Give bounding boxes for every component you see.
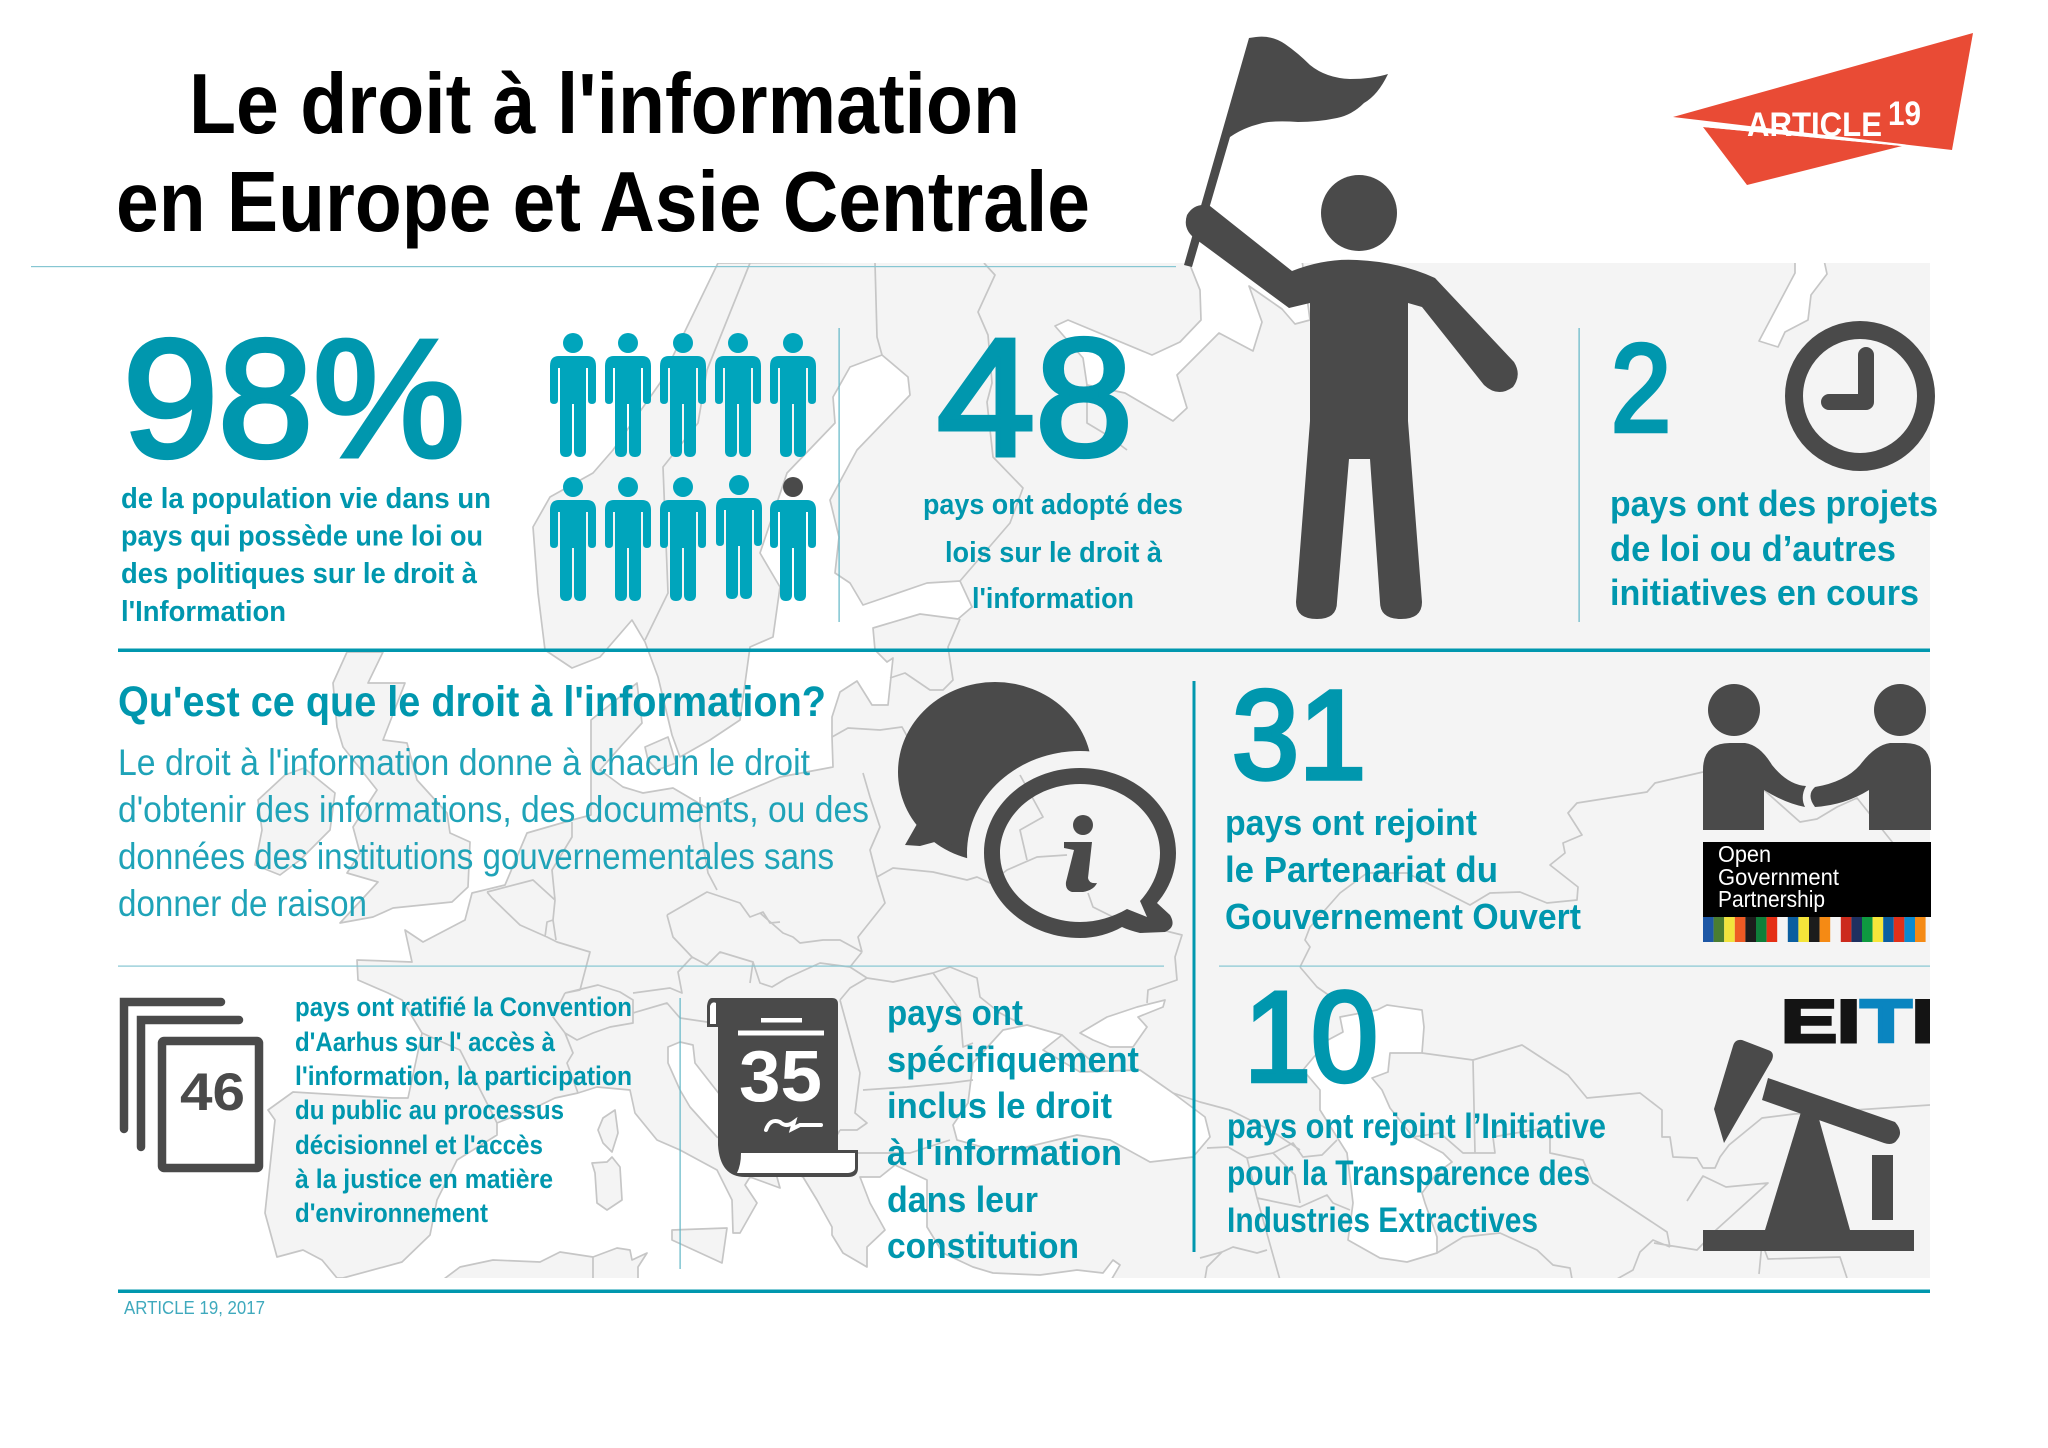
panel: 46 countries Aarhus convention xyxy=(124,992,632,1228)
text: laws adopted: lois sur le droit à xyxy=(945,537,1163,569)
map: North Africa xyxy=(444,1247,648,1278)
icon: figure holding a flag xyxy=(1184,37,1518,619)
footer credit: ARTICLE 19, 2017 xyxy=(124,1298,265,1318)
logo: Article 19 xyxy=(1673,33,1973,185)
text: Aarhus convention: d'environnement xyxy=(295,1198,488,1228)
text: Aarhus convention: à la justice en matière xyxy=(295,1164,553,1194)
icon: handshake xyxy=(1703,684,1931,830)
text: Aarhus convention: pays ont ratifié la Convention xyxy=(295,992,632,1022)
map: United Kingdom xyxy=(333,652,470,923)
text: Aarhus convention: d'Aarhus sur l' accès à xyxy=(295,1027,556,1057)
map: Caspian Sea xyxy=(1303,1005,1452,1262)
text: draft laws: de loi ou d’autres xyxy=(1610,528,1896,569)
text: definition xyxy=(118,742,869,924)
text: population description xyxy=(121,483,491,628)
icon: scroll with 35: 35 xyxy=(739,1037,822,1117)
big number 31: 31 xyxy=(1232,664,1366,806)
map: Black Sea xyxy=(953,1025,1210,1162)
big number 98%: 98% xyxy=(123,306,465,492)
text: constitutional right: constitution xyxy=(887,1225,1079,1266)
map: Ireland xyxy=(255,768,335,875)
panel: 31 countries open government xyxy=(1225,664,1931,942)
heading: Qu'est ce que le droit à l'information? xyxy=(118,678,826,726)
map: Corsica xyxy=(598,1110,618,1152)
logo: Article 19: ARTICLE xyxy=(1747,106,1882,144)
title: en Europe et Asie Centrale xyxy=(116,155,1090,250)
map: Sea of Azov xyxy=(1080,1000,1165,1047)
title xyxy=(116,57,1090,250)
text: draft laws xyxy=(1610,483,1938,613)
text: population description: de la population vie dans un xyxy=(121,483,491,515)
text: laws adopted: l'information xyxy=(972,583,1134,615)
big number 2: 2 xyxy=(1611,320,1671,458)
map: country borders xyxy=(422,263,1930,1280)
logo: Open Government Partnership xyxy=(1703,841,1931,942)
text: Aarhus convention: décisionnel et l'accès xyxy=(295,1130,543,1160)
big number 10: 10 xyxy=(1244,966,1378,1109)
logo: Open Government Partnership: Open xyxy=(1718,841,1771,867)
text: definition: données des institutions gouvernementales sans xyxy=(118,836,834,877)
logo: Open Government Partnership: Partnership xyxy=(1718,886,1825,912)
text: laws adopted: pays ont adopté des xyxy=(923,489,1183,521)
text: definition: donner de raison xyxy=(118,883,367,924)
text: extractive industries: pour la Transparence des xyxy=(1227,1154,1590,1193)
map: Sicily xyxy=(672,1228,727,1263)
text: open government partnership: pays ont rejoint xyxy=(1225,802,1477,843)
text: constitutional right: pays ont xyxy=(887,992,1023,1033)
text: Aarhus convention: du public au processus xyxy=(295,1095,564,1125)
logo: Open Government Partnership: Government xyxy=(1718,864,1840,890)
icon: oil pump xyxy=(1703,1040,1914,1251)
panel: 10 countries EITI xyxy=(1227,966,1935,1251)
title: Le droit à l'information xyxy=(189,57,1020,152)
panel: what is the right to information xyxy=(118,678,1176,938)
icon: scroll with 35 xyxy=(707,998,858,1177)
text: open government partnership: le Partenariat du xyxy=(1225,849,1498,890)
text: population description: l'Information xyxy=(121,596,286,628)
text: constitutional right: à l'information xyxy=(887,1132,1122,1173)
icon: clock xyxy=(1794,330,1926,462)
logo: Article 19: 19 xyxy=(1888,95,1921,133)
text: definition: Le droit à l'information donne à chacun le droit xyxy=(118,742,811,783)
panel: 98% population xyxy=(121,306,816,628)
text: extractive industries: Industries Extractives xyxy=(1227,1201,1538,1240)
map: Sardinia xyxy=(592,1157,622,1210)
text: constitutional right: dans leur xyxy=(887,1179,1038,1220)
panel: 35 countries constitution xyxy=(707,992,1139,1266)
text: draft laws: initiatives en cours xyxy=(1610,572,1919,613)
text: extractive industries xyxy=(1227,1107,1606,1240)
text: constitutional right: inclus le droit xyxy=(887,1085,1112,1126)
text: Aarhus convention: l'information, la participation xyxy=(295,1061,632,1091)
panel: 48 countries xyxy=(923,305,1183,615)
big number 48: 48 xyxy=(937,305,1133,491)
map: Arctic inlet xyxy=(1759,260,1827,347)
text: population description: pays qui possède une loi ou xyxy=(121,520,483,552)
text: definition: d'obtenir des informations, des documents, ou des xyxy=(118,789,869,830)
panel: 2 countries xyxy=(1610,320,1938,613)
icon: stacked documents with 46 xyxy=(124,1002,259,1168)
text: open government partnership: Gouvernement Ouvert xyxy=(1225,896,1581,937)
logo: EITI: EI TI xyxy=(1781,988,1935,1055)
icon: stacked documents with 46: 46 xyxy=(180,1063,245,1122)
map: Danish island xyxy=(645,737,676,770)
icon: speech bubbles with info xyxy=(898,682,1176,938)
text: constitutional right: spécifiquement xyxy=(887,1039,1139,1080)
icon: ten people pictogram xyxy=(550,333,816,601)
text: Aarhus convention xyxy=(295,992,632,1228)
background map of Europe and Central Asia xyxy=(255,260,1932,1282)
text: draft laws: pays ont des projets xyxy=(1610,483,1938,524)
text: population description: des politiques sur le droit à xyxy=(121,558,478,590)
text: laws adopted xyxy=(923,489,1183,615)
text: open government partnership xyxy=(1225,802,1581,937)
text: extractive industries: pays ont rejoint l’Initiative xyxy=(1227,1107,1606,1146)
text: constitutional right xyxy=(887,992,1139,1266)
